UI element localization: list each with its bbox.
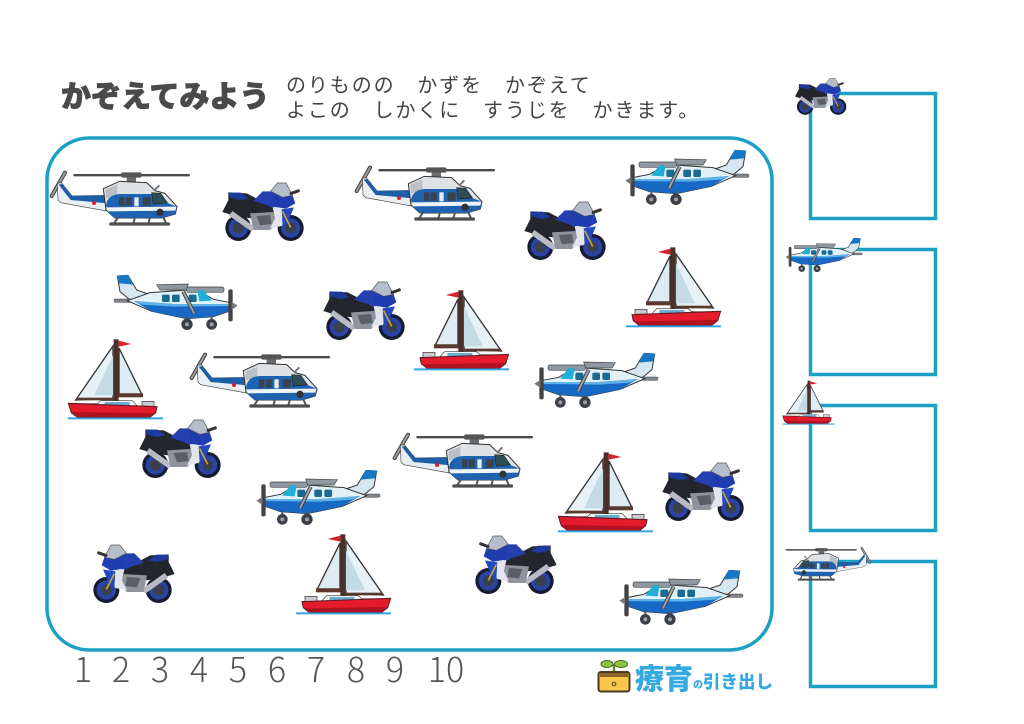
number line: 2 xyxy=(112,643,130,692)
icon: boat 2 xyxy=(414,290,509,370)
logo text: 引き出し xyxy=(703,672,773,692)
panel: vehicles frame xyxy=(47,138,772,650)
icon: key helicopter xyxy=(786,548,870,581)
number line: 6 xyxy=(268,643,286,692)
answer box: motorcycles xyxy=(810,94,936,218)
number line: 1 xyxy=(74,643,92,692)
icon: motorcycle 5 xyxy=(662,463,744,521)
number line: 4 xyxy=(190,643,208,692)
icon: plane 1 xyxy=(114,275,238,330)
logo xyxy=(598,660,773,696)
logo text: の xyxy=(693,679,703,691)
answer box: helicopters xyxy=(810,562,936,686)
icon: boat 1 xyxy=(626,247,721,327)
icon: helicopter 1 xyxy=(52,172,190,226)
icon: logo sprout box xyxy=(598,660,630,692)
number line: 8 xyxy=(347,643,365,692)
icon: motorcycle 6 xyxy=(93,545,175,603)
number line xyxy=(74,643,464,692)
answer box: planes xyxy=(810,250,936,374)
number line: 10 xyxy=(428,643,464,692)
icon: helicopter 3 xyxy=(192,354,330,408)
icon: helicopter 2 xyxy=(357,167,495,221)
icon: motorcycle 2 xyxy=(524,202,606,260)
number line: 9 xyxy=(386,643,404,692)
icon: boat 3 xyxy=(68,339,163,419)
icon: plane 2 xyxy=(625,150,749,205)
icon: motorcycle 4 xyxy=(139,420,221,478)
icon: boat 5 xyxy=(296,534,391,614)
instructions text xyxy=(286,74,700,122)
icon: plane 4 xyxy=(256,470,380,525)
icon: helicopter 4 xyxy=(395,434,533,488)
icon: motorcycle 1 xyxy=(222,183,304,241)
answer box: boats xyxy=(810,406,936,530)
icon: key boat xyxy=(782,381,835,425)
icon: boat 4 xyxy=(558,452,653,532)
logo text: 療育 xyxy=(635,663,693,696)
icon: motorcycle 3 xyxy=(323,282,405,340)
icon: key plane xyxy=(786,238,862,272)
number line: 7 xyxy=(307,643,325,692)
number line: 3 xyxy=(151,643,169,692)
icon: motorcycle 7 xyxy=(475,536,557,594)
instructions text: よこの しかくに すうじを かきます。 xyxy=(286,100,700,122)
title: かぞえてみよう xyxy=(61,81,270,114)
icon: key motorcycle xyxy=(795,78,846,115)
icon: plane 5 xyxy=(619,570,743,625)
icon: plane 3 xyxy=(534,353,658,408)
number line: 5 xyxy=(229,643,247,692)
instructions text: のりものの かずを かぞえて xyxy=(286,74,592,97)
